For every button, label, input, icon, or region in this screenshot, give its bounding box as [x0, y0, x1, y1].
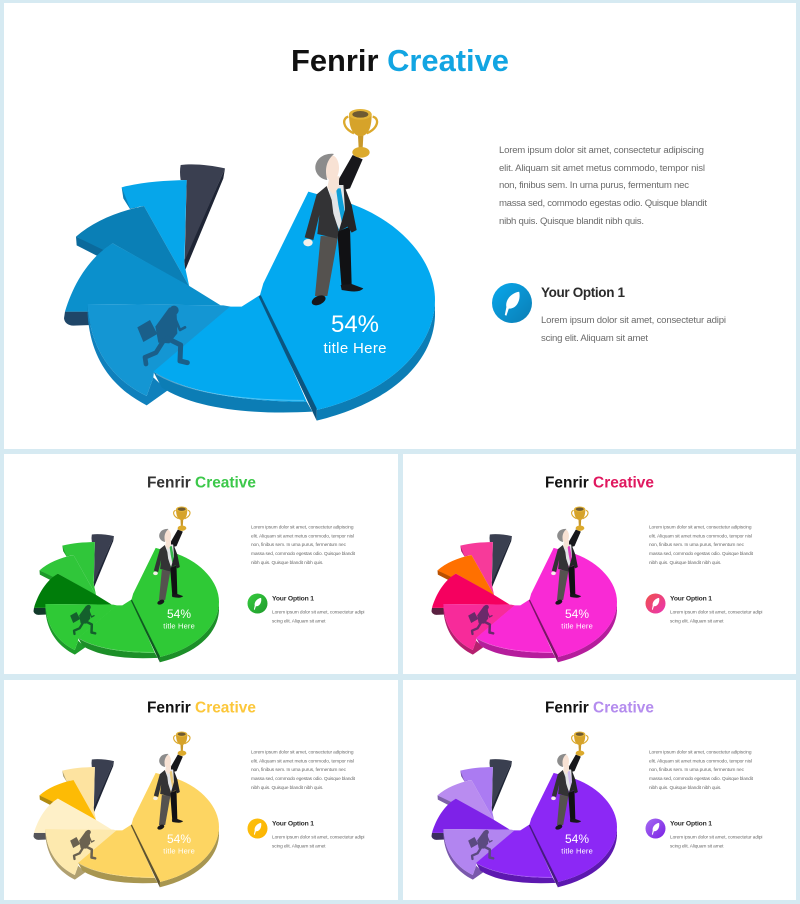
paragraph: massa sed, commodo egestas odio. Quisque blandit: [499, 198, 707, 209]
option text: Lorem ipsum dolor sit amet, consectetur adipi: [670, 610, 762, 616]
slice: dark back wedge: [180, 164, 225, 271]
panel: blue main slide: [4, 3, 796, 449]
icon: trophy: [572, 731, 588, 756]
icon: businessman: [303, 154, 363, 307]
paragraph: nibh quis. Quisque blandit nibh quis.: [499, 216, 644, 227]
slice: arrow wedge: [88, 304, 231, 405]
panel: purple slide: [403, 680, 796, 900]
pie chart: [33, 731, 219, 887]
icon: trophy: [572, 506, 588, 531]
slice title: title Here: [561, 846, 593, 856]
pie chart: [431, 731, 617, 887]
paragraph: non, finibus sem. In urna purus, fermentum nec: [499, 180, 689, 191]
option text: [541, 315, 726, 344]
title: Fenrir Creative: [147, 700, 256, 716]
paragraph: nibh quis. Quisque blandit nibh quis.: [649, 560, 722, 566]
option text: scing elit. Aliquam sit amet: [541, 333, 648, 344]
option text: [670, 610, 762, 624]
icon: trophy: [174, 506, 190, 531]
icon: feather badge: [248, 818, 268, 838]
slice: fourth wedge: [64, 243, 221, 326]
value label: 54%: [331, 311, 379, 338]
option heading: Your Option 1: [541, 285, 625, 300]
value label: 54%: [565, 607, 589, 621]
option heading: Your Option 1: [670, 596, 712, 602]
option heading: Your Option 1: [670, 820, 712, 828]
paragraph: non, finibus sem. In urna purus, fermentum nec: [251, 542, 347, 548]
paragraph: Lorem ipsum dolor sit amet, consectetur adipiscing: [251, 524, 354, 530]
panel: green slide: [4, 454, 398, 674]
option heading: Your Option 1: [272, 596, 314, 602]
paragraph: [499, 145, 707, 227]
pie chart: [431, 506, 617, 662]
paragraph: elit. Aliquam sit amet metus commodo, tempor nisl: [499, 163, 705, 174]
paragraph: Lorem ipsum dolor sit amet, consectetur adipiscing: [251, 750, 354, 756]
slice: sixth wedge: [122, 180, 189, 287]
icon: feather badge: [646, 818, 666, 838]
slice title: title Here: [324, 340, 386, 357]
option text: Lorem ipsum dolor sit amet, consectetur adipi: [541, 315, 726, 326]
slice: main wedge: [259, 192, 435, 421]
slice title: title Here: [163, 622, 195, 630]
option text: scing elit. Aliquam sit amet: [272, 844, 326, 850]
paragraph: nibh quis. Quisque blandit nibh quis.: [251, 560, 324, 566]
title: Fenrir Creative: [545, 700, 654, 716]
slice: second wedge: [153, 295, 312, 412]
paragraph: non, finibus sem. In urna purus, fermentum nec: [649, 542, 745, 548]
option text: Lorem ipsum dolor sit amet, consectetur adipi: [670, 834, 762, 840]
option text: scing elit. Aliquam sit amet: [670, 618, 724, 624]
paragraph: elit. Aliquam sit amet metus commodo, tempor nisl: [649, 758, 752, 764]
icon: running businessman: [70, 830, 95, 859]
icon: businessman: [153, 754, 183, 831]
icon: running businessman: [468, 605, 493, 634]
icon: trophy: [174, 731, 190, 756]
paragraph: non, finibus sem. In urna purus, fermentum nec: [649, 767, 745, 773]
icon: running businessman: [468, 830, 493, 859]
icon: trophy: [344, 109, 377, 158]
icon: feather badge: [248, 594, 268, 614]
paragraph: Lorem ipsum dolor sit amet, consectetur adipiscing: [499, 145, 704, 156]
slice title: title Here: [163, 846, 195, 856]
value label: 54%: [565, 832, 589, 846]
icon: feather badge: [646, 594, 666, 614]
pie chart: [64, 109, 435, 421]
value label: 54%: [167, 832, 191, 846]
value label: 54%: [167, 607, 191, 621]
paragraph: elit. Aliquam sit amet metus commodo, tempor nisl: [251, 758, 354, 764]
option heading: Your Option 1: [272, 820, 314, 828]
paragraph: Lorem ipsum dolor sit amet, consectetur adipiscing: [649, 524, 752, 530]
paragraph: massa sed, commodo egestas odio. Quisque blandit: [251, 551, 356, 557]
icon: businessman: [153, 529, 183, 606]
icon: feather badge: [492, 283, 532, 323]
paragraph: [649, 524, 754, 566]
paragraph: elit. Aliquam sit amet metus commodo, tempor nisl: [649, 534, 752, 540]
option text: Lorem ipsum dolor sit amet, consectetur adipi: [272, 834, 364, 840]
paragraph: [649, 750, 754, 791]
paragraph: elit. Aliquam sit amet metus commodo, tempor nisl: [251, 534, 354, 540]
option text: [272, 834, 364, 850]
slice title: title Here: [561, 622, 593, 630]
option text: [272, 610, 364, 624]
pie chart: [33, 506, 219, 662]
paragraph: massa sed, commodo egestas odio. Quisque blandit: [649, 776, 754, 782]
paragraph: [251, 750, 356, 791]
paragraph: massa sed, commodo egestas odio. Quisque blandit: [649, 551, 754, 557]
paragraph: [251, 524, 356, 566]
slice: fifth wedge: [76, 206, 189, 287]
option text: Lorem ipsum dolor sit amet, consectetur adipi: [272, 610, 364, 616]
option text: scing elit. Aliquam sit amet: [272, 618, 326, 624]
title: Fenrir Creative: [147, 474, 256, 492]
icon: running businessman: [137, 306, 187, 364]
title: Fenrir Creative: [545, 474, 654, 492]
option text: [670, 834, 762, 850]
icon: businessman: [551, 529, 581, 606]
option text: scing elit. Aliquam sit amet: [670, 844, 724, 850]
paragraph: nibh quis. Quisque blandit nibh quis.: [649, 785, 722, 791]
icon: businessman: [551, 754, 581, 831]
title: Fenrir Creative: [291, 43, 509, 78]
paragraph: massa sed, commodo egestas odio. Quisque blandit: [251, 776, 356, 782]
panel: yellow slide: [4, 680, 398, 900]
icon: running businessman: [70, 605, 95, 634]
paragraph: Lorem ipsum dolor sit amet, consectetur adipiscing: [649, 750, 752, 756]
paragraph: nibh quis. Quisque blandit nibh quis.: [251, 785, 324, 791]
panel: pink slide: [403, 454, 796, 674]
paragraph: non, finibus sem. In urna purus, fermentum nec: [251, 767, 347, 773]
